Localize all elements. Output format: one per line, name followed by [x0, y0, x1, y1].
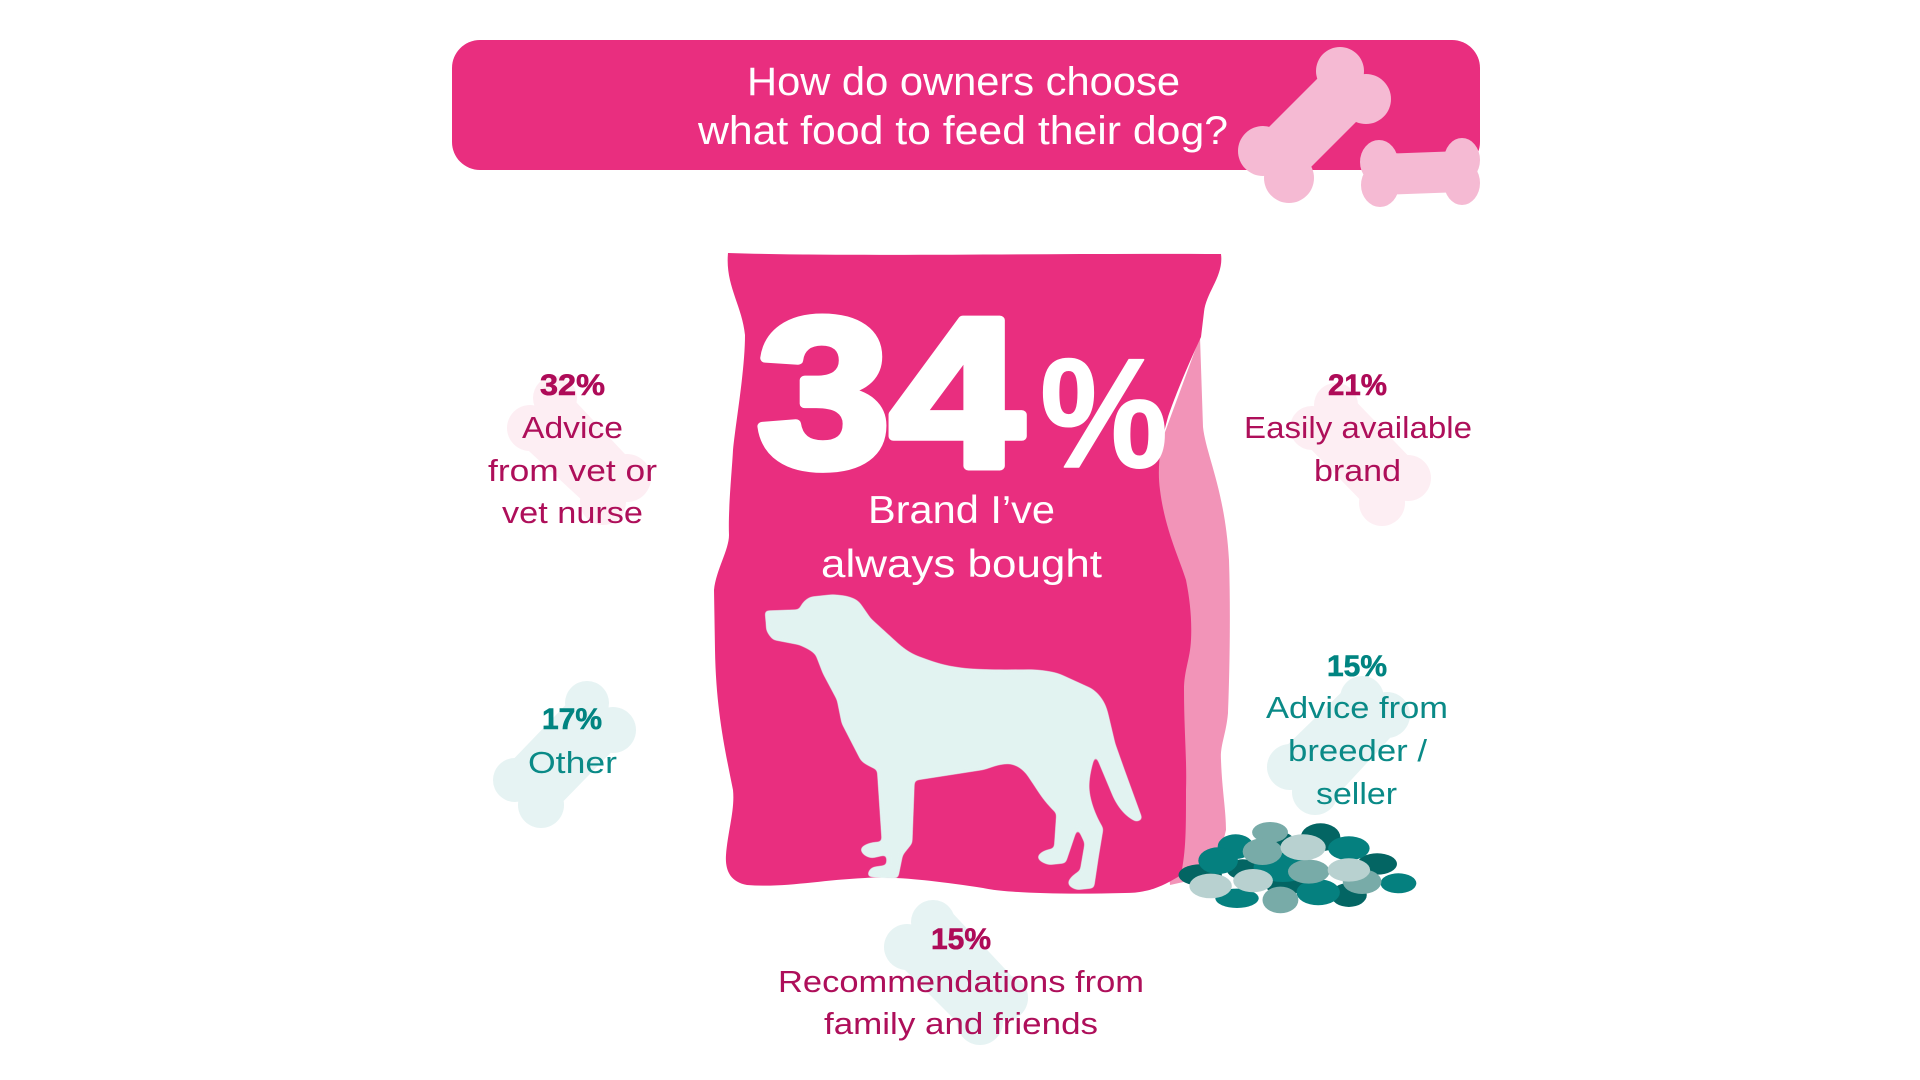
- big percentage: 34: [757, 274, 1023, 511]
- background bone: 32%: [507, 376, 651, 525]
- bag front: [714, 253, 1221, 894]
- kibble pile: [1179, 822, 1416, 913]
- background bone: 15% breeder: [1267, 676, 1410, 815]
- label: 32% advice from vet: [488, 369, 666, 530]
- bag label text: Brand I’ve: [868, 489, 1055, 532]
- label: 21% easily available brand: brand: [1314, 453, 1401, 488]
- dog silhouette: [765, 594, 1143, 890]
- background bone: 17%: [493, 681, 636, 828]
- label: 21% easily available brand: Easily available: [1244, 410, 1472, 445]
- label: 21% easily available brand: [1244, 369, 1481, 488]
- label: 15% advice from breeder: breeder /: [1288, 733, 1427, 768]
- label: 15% recommendations: 15%: [931, 923, 991, 956]
- label: 15% advice from breeder: Advice from: [1266, 690, 1448, 725]
- big percentage: [757, 274, 1168, 511]
- background bone: 21%: [1290, 383, 1431, 526]
- icon: small bone: [1360, 138, 1480, 207]
- label: 21% easily available brand: 21%: [1328, 369, 1387, 402]
- bag side strip: [1140, 337, 1230, 885]
- label: 17% other: 17%: [542, 703, 602, 736]
- label: 17% other: [528, 703, 617, 780]
- label: 17% other: Other: [528, 745, 617, 780]
- dog food bag: [714, 253, 1416, 913]
- label: 15% recommendations: [778, 923, 1153, 1041]
- background bone: 15% family: [884, 900, 1028, 1045]
- title text: How do owners choose: [747, 60, 1180, 104]
- label: 15% advice from breeder: 15%: [1327, 650, 1387, 683]
- label: 15% advice from breeder: [1266, 650, 1457, 811]
- bag label text: always bought: [821, 543, 1102, 586]
- label: 32% advice from vet: from vet or: [488, 453, 657, 488]
- big percentage: %: [1040, 327, 1168, 501]
- title banner: [452, 40, 1480, 207]
- icon: large bone: [1238, 47, 1391, 203]
- label: 15% recommendations: family and friends: [824, 1006, 1098, 1041]
- label: 32% advice from vet: 32%: [540, 369, 605, 402]
- title text: what food to feed their dog?: [697, 109, 1228, 153]
- label: 32% advice from vet: Advice: [522, 410, 623, 445]
- label: 15% advice from breeder: seller: [1316, 776, 1397, 811]
- label: 32% advice from vet: vet nurse: [502, 495, 643, 530]
- label: 15% recommendations: Recommendations from: [778, 964, 1144, 999]
